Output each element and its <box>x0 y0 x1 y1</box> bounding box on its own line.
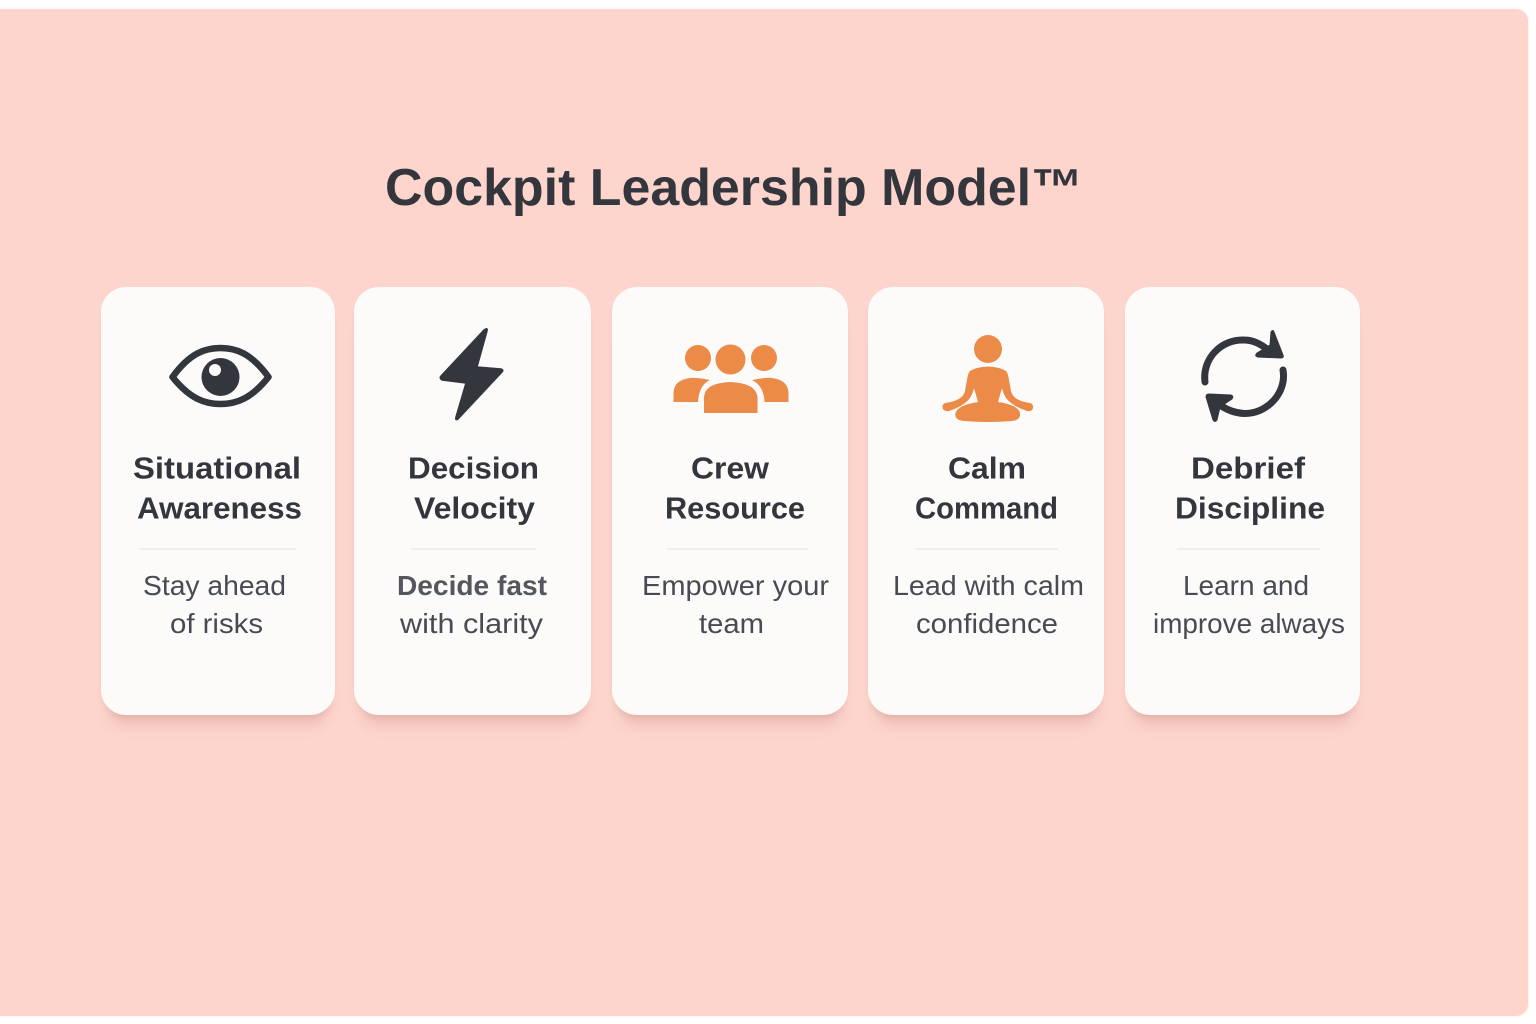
heading: Situational Awareness: Awareness <box>137 490 302 526</box>
heading: Crew Resource <box>665 450 805 526</box>
description: Empower your team: Empower your <box>642 570 829 601</box>
heading: Crew Resource: Crew <box>691 450 770 486</box>
heading: Calm Command <box>915 450 1058 526</box>
heading: Situational Awareness: Situational <box>133 450 301 486</box>
heading: Crew Resource: Resource <box>665 490 805 526</box>
description: Decide fast with clarity <box>397 570 547 639</box>
heading: Decision Velocity: Velocity <box>414 490 536 526</box>
description: Learn and improve always <box>1153 570 1345 639</box>
description: Lead with calm confidence: confidence <box>916 608 1058 639</box>
heading: Decision Velocity <box>408 450 539 526</box>
panel: Crew Resource card <box>612 287 848 715</box>
description: Empower your team: team <box>699 608 764 639</box>
panel: Situational Awareness card <box>101 287 335 715</box>
description: Decide fast with clarity: with clarity <box>399 608 543 639</box>
description: Stay ahead of risks <box>143 570 286 639</box>
icon: three people <box>674 344 788 413</box>
panel: Decision Velocity card <box>354 287 591 715</box>
panel: Debrief Discipline card <box>1125 287 1360 715</box>
heading: Situational Awareness <box>133 450 302 526</box>
icon: lightning bolt <box>440 329 503 420</box>
icon: refresh arrows <box>1205 330 1284 422</box>
heading: Debrief Discipline: Debrief <box>1191 450 1306 486</box>
description: Stay ahead of risks: of risks <box>170 608 263 639</box>
heading: Decision Velocity: Decision <box>408 450 539 486</box>
description: Decide fast with clarity: Decide fast <box>397 570 547 601</box>
panel: Calm Command card <box>868 287 1104 715</box>
description: Lead with calm confidence: Lead with calm <box>893 570 1084 601</box>
description: Stay ahead of risks: Stay ahead <box>143 570 286 601</box>
heading: Calm Command: Command <box>915 490 1058 526</box>
heading: Debrief Discipline <box>1175 450 1325 526</box>
description: Learn and improve always: Learn and <box>1183 570 1309 601</box>
description: Lead with calm confidence <box>893 570 1084 639</box>
description: Learn and improve always: improve always <box>1153 608 1345 639</box>
heading: Calm Command: Calm <box>948 450 1026 486</box>
icon: meditating person <box>942 335 1033 422</box>
icon: eye <box>172 348 268 404</box>
heading: Debrief Discipline: Discipline <box>1175 490 1325 526</box>
title: Cockpit Leadership Model™ <box>385 159 1083 217</box>
description: Empower your team <box>642 570 829 639</box>
